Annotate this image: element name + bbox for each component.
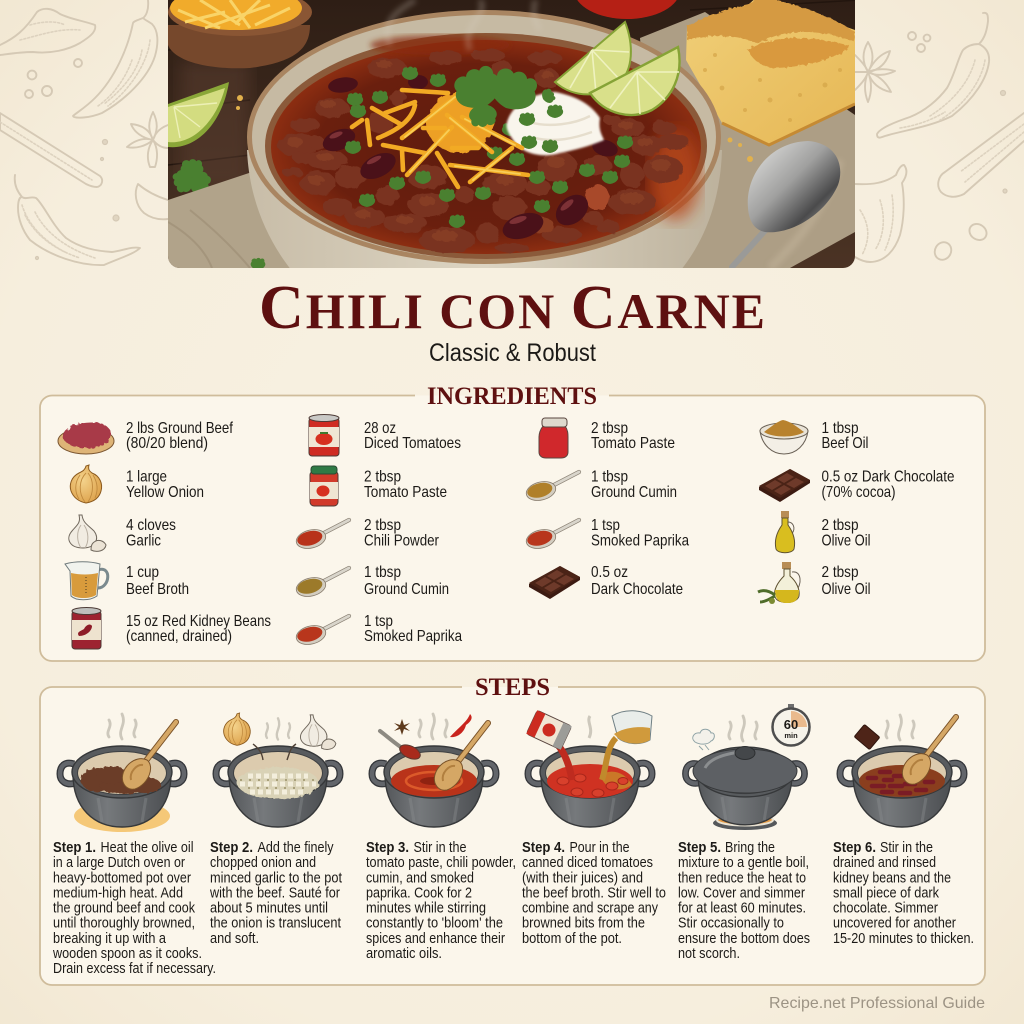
- step 6 text: [833, 839, 974, 947]
- step 3 text: Stir in the: [414, 839, 466, 856]
- heading: ingredients: INGREDIENTS: [427, 383, 597, 410]
- ingredient: diced tomatoes: Diced Tomatoes: [364, 435, 461, 452]
- ingredient: ground beef: [58, 420, 233, 454]
- step 6 text: 15-20 minutes to thicken.: [833, 930, 974, 947]
- step 1 text: breaking it up with a: [53, 930, 166, 947]
- shredded cheese: [352, 88, 528, 187]
- step 5 text: low. Cover and simmer: [678, 884, 805, 902]
- ingredient: smoked paprika: Smoked Paprika: [364, 628, 462, 645]
- ingredient: olive oil jug: [758, 562, 870, 604]
- step 1 text: until thoroughly browned,: [53, 915, 195, 932]
- ingredient: garlic: 4 cloves: [126, 517, 176, 534]
- step 2 text: about 5 minutes until: [210, 900, 328, 916]
- step 3 text: spices and enhance their: [366, 930, 505, 947]
- chili bowl: [247, 0, 722, 268]
- ingredient: chili powder: Chili Powder: [364, 532, 440, 550]
- ingredient: ground cumin 2: [524, 468, 677, 503]
- ground beef and chili: [278, 49, 690, 253]
- tomato: [574, 0, 680, 19]
- ingredient: smoked paprika 2: 1 tsp: [591, 517, 620, 534]
- panel frame: [40, 396, 985, 661]
- step 2 text: chopped onion and: [210, 854, 316, 871]
- step 6 text: drained and rinsed: [833, 854, 936, 871]
- step 6 text: small piece of dark: [833, 884, 939, 902]
- step 4 text: Pour in the: [570, 839, 630, 856]
- step 6 text: chocolate. Simmer: [833, 900, 938, 916]
- step 1 text: wooden spoon as it cooks.: [52, 945, 202, 962]
- step 2 text: Add the finely: [258, 839, 334, 856]
- step 2 text: Step 2.: [210, 839, 253, 856]
- step 6 illustration: [840, 715, 964, 827]
- crumbs: [236, 95, 753, 162]
- step 4 text: browned bits from the: [522, 915, 645, 932]
- ingredient: olive oil bottle: [775, 511, 870, 553]
- ingredient: smoked paprika 2: [524, 517, 689, 551]
- ingredient: garlic: [69, 515, 176, 551]
- cilantro bits: [345, 66, 633, 228]
- ingredient: beef broth: [65, 562, 189, 600]
- step 1 text: in a large Dutch oven or: [53, 854, 185, 871]
- step 5 text: [678, 839, 810, 962]
- step 4 text: bottom of the pot.: [522, 930, 622, 947]
- ingredient: ground cumin: Ground Cumin: [364, 581, 449, 598]
- step 5 text: Step 5.: [678, 839, 721, 856]
- step 1 text: the ground beef and cook: [53, 900, 195, 916]
- ingredient: smoked paprika: 1 tsp: [364, 613, 393, 630]
- ingredient: ground cumin 2: 1 tbsp: [591, 468, 628, 486]
- sour cream: [507, 92, 604, 155]
- cornbread: [686, 0, 855, 145]
- step 3 illustration: [372, 714, 496, 827]
- ingredient: olive oil jug: 2 tbsp: [822, 564, 859, 581]
- step 4 text: canned diced tomatoes: [522, 854, 653, 871]
- ingredient: bowl of beef oil: Beef Oil: [822, 435, 868, 452]
- hero photo: bowl of chili: [168, 0, 855, 268]
- step 2 illustration: [216, 713, 340, 827]
- ingredient: ground cumin 2: Ground Cumin: [591, 484, 677, 501]
- step 3 text: aromatic oils.: [366, 945, 442, 962]
- ingredient: beef broth: Beef Broth: [126, 581, 189, 598]
- panel frame: [40, 687, 985, 985]
- ingredient: onion: [70, 465, 204, 503]
- ingredient: onion: 1 large: [126, 468, 167, 486]
- steam: [387, 0, 540, 50]
- step 5 text: mixture to a gentle boil,: [678, 854, 809, 871]
- ingredient: tomato paste jar: [310, 466, 447, 506]
- ingredient: chili powder: [294, 517, 440, 551]
- ingredient: olive oil bottle: Olive Oil: [822, 532, 870, 550]
- ingredient: tomato paste glass jar: 2 tbsp: [591, 420, 628, 437]
- ingredient: olive oil bottle: 2 tbsp: [822, 517, 859, 534]
- step 5 text: for at least 60 minutes.: [678, 900, 806, 916]
- ingredient: onion: Yellow Onion: [126, 484, 204, 501]
- step 3 text: cumin, and smoked: [366, 870, 474, 886]
- heading: steps: STEPS: [475, 674, 550, 701]
- step 1 text: [52, 839, 216, 977]
- ingredient: kidney beans: (canned, drained): [126, 628, 232, 645]
- ingredient: tomato paste jar: Tomato Paste: [364, 484, 447, 501]
- cilantro at bottom: [250, 258, 266, 268]
- step 5 illustration: min: [784, 731, 798, 740]
- step 5 text: Stir occasionally to: [678, 915, 784, 932]
- step 4 text: Step 4.: [522, 839, 565, 856]
- bean highlights: [329, 130, 575, 226]
- step 4 text: the beef broth. Stir well to: [522, 884, 666, 902]
- ingredient: ground cumin: 1 tbsp: [364, 564, 401, 581]
- ingredient: dark chocolate: 0.5 oz: [591, 564, 628, 581]
- ingredient: kidney beans: 15 oz Red Kidney Beans: [126, 613, 271, 630]
- right napkin: [640, 12, 855, 268]
- step 1 text: Step 1.: [53, 839, 96, 856]
- ingredient: dark chocolate: Dark Chocolate: [591, 581, 683, 598]
- ingredient: garlic: Garlic: [126, 532, 161, 550]
- step 3 text: tomato paste, chili powder,: [366, 854, 516, 871]
- step 1 text: medium-high heat. Add: [53, 884, 183, 902]
- ingredient: diced tomatoes: 28 oz: [364, 420, 396, 437]
- step 5 text: ensure the bottom does: [678, 930, 810, 947]
- step 6 text: kidney beans and the: [833, 870, 951, 886]
- step 5 illustration: [685, 704, 810, 830]
- ingredient: bowl of beef oil: [760, 420, 868, 454]
- ingredient: tomato paste glass jar: Tomato Paste: [591, 435, 675, 452]
- step 3 text: Step 3.: [366, 839, 409, 856]
- step 2 text: and soft.: [210, 930, 259, 947]
- ingredient: bowl of beef oil: 1 tbsp: [822, 420, 859, 437]
- step 2 text: the onion is translucent: [210, 915, 342, 932]
- subtitle: Classic & Robust: [429, 339, 596, 367]
- step 4 illustration: [526, 710, 652, 827]
- step 4 text: combine and scrape any: [522, 900, 658, 916]
- line art: left spice sketches: [0, 0, 168, 265]
- step 1 text: Drain excess fat if necessary.: [53, 960, 216, 977]
- cilantro sprig: [454, 66, 556, 127]
- ingredient: ground beef: 2 lbs Ground Beef: [126, 420, 233, 437]
- step 1 illustration: [60, 714, 184, 832]
- step 6 text: uncovered for another: [833, 915, 956, 932]
- step 5 text: then reduce the heat to: [678, 870, 806, 886]
- step 3 text: minutes while stirring: [366, 900, 486, 916]
- step 6 text: Stir in the: [880, 839, 933, 856]
- step 3 text: paprika. Cook for 2: [366, 884, 472, 902]
- ingredient: chocolate 70 percent: [759, 468, 955, 502]
- step 6 text: Step 6.: [833, 839, 876, 856]
- step 5 illustration: 60: [784, 717, 798, 732]
- step 3 text: [366, 839, 516, 962]
- step 5 text: Bring the: [725, 839, 775, 856]
- ingredient: dark chocolate: [529, 564, 683, 599]
- ingredient: smoked paprika 2: Smoked Paprika: [591, 532, 689, 550]
- line art: right spice sketches: [855, 13, 1024, 263]
- step 2 text: with the beef. Sauté for: [209, 884, 340, 902]
- left napkin: [168, 173, 290, 268]
- lime wedge on table: [168, 82, 229, 147]
- limes in bowl: [555, 22, 680, 115]
- spoon: [732, 141, 840, 267]
- panel: ingredients: [40, 383, 985, 661]
- ingredient: smoked paprika: [294, 613, 462, 647]
- ingredient: tomato paste jar: 2 tbsp: [364, 468, 401, 486]
- step 1 text: heavy-bottomed pot over: [53, 870, 191, 886]
- step 1 text: Heat the olive oil: [100, 839, 194, 856]
- meat highlights: [287, 60, 671, 242]
- step 2 text: minced garlic to the pot: [210, 870, 343, 886]
- ingredient: chocolate 70 percent: (70% cocoa): [822, 484, 896, 501]
- step 3 text: constantly to 'bloom' the: [366, 915, 503, 932]
- ingredient: diced tomatoes: [309, 414, 461, 456]
- ingredient: ground cumin: [294, 564, 449, 599]
- footer credit: Recipe.net Professional Guide: [769, 995, 985, 1012]
- title: CHILI CON CARNE: [259, 274, 765, 342]
- ingredient: olive oil jug: Olive Oil: [822, 581, 870, 598]
- bowl of shredded cheese: [168, 0, 312, 68]
- ingredient: chili powder: 2 tbsp: [364, 517, 401, 534]
- step 2 text: [209, 839, 343, 947]
- ingredient: beef broth: 1 cup: [126, 564, 159, 581]
- kidney beans: [319, 75, 620, 244]
- step 4 text: [522, 839, 666, 947]
- ingredient: chocolate 70 percent: 0.5 oz Dark Chocolate: [822, 468, 955, 486]
- ingredient: kidney beans: [72, 608, 271, 649]
- cilantro on table: [172, 159, 211, 192]
- ingredient: ground beef: (80/20 blend): [126, 435, 208, 452]
- panel: steps: [40, 674, 985, 985]
- ingredient: tomato paste glass jar: [539, 418, 675, 458]
- step 4 text: (with their juices) and: [522, 870, 643, 886]
- wood table: [168, 0, 860, 268]
- step 5 text: not scorch.: [678, 945, 740, 962]
